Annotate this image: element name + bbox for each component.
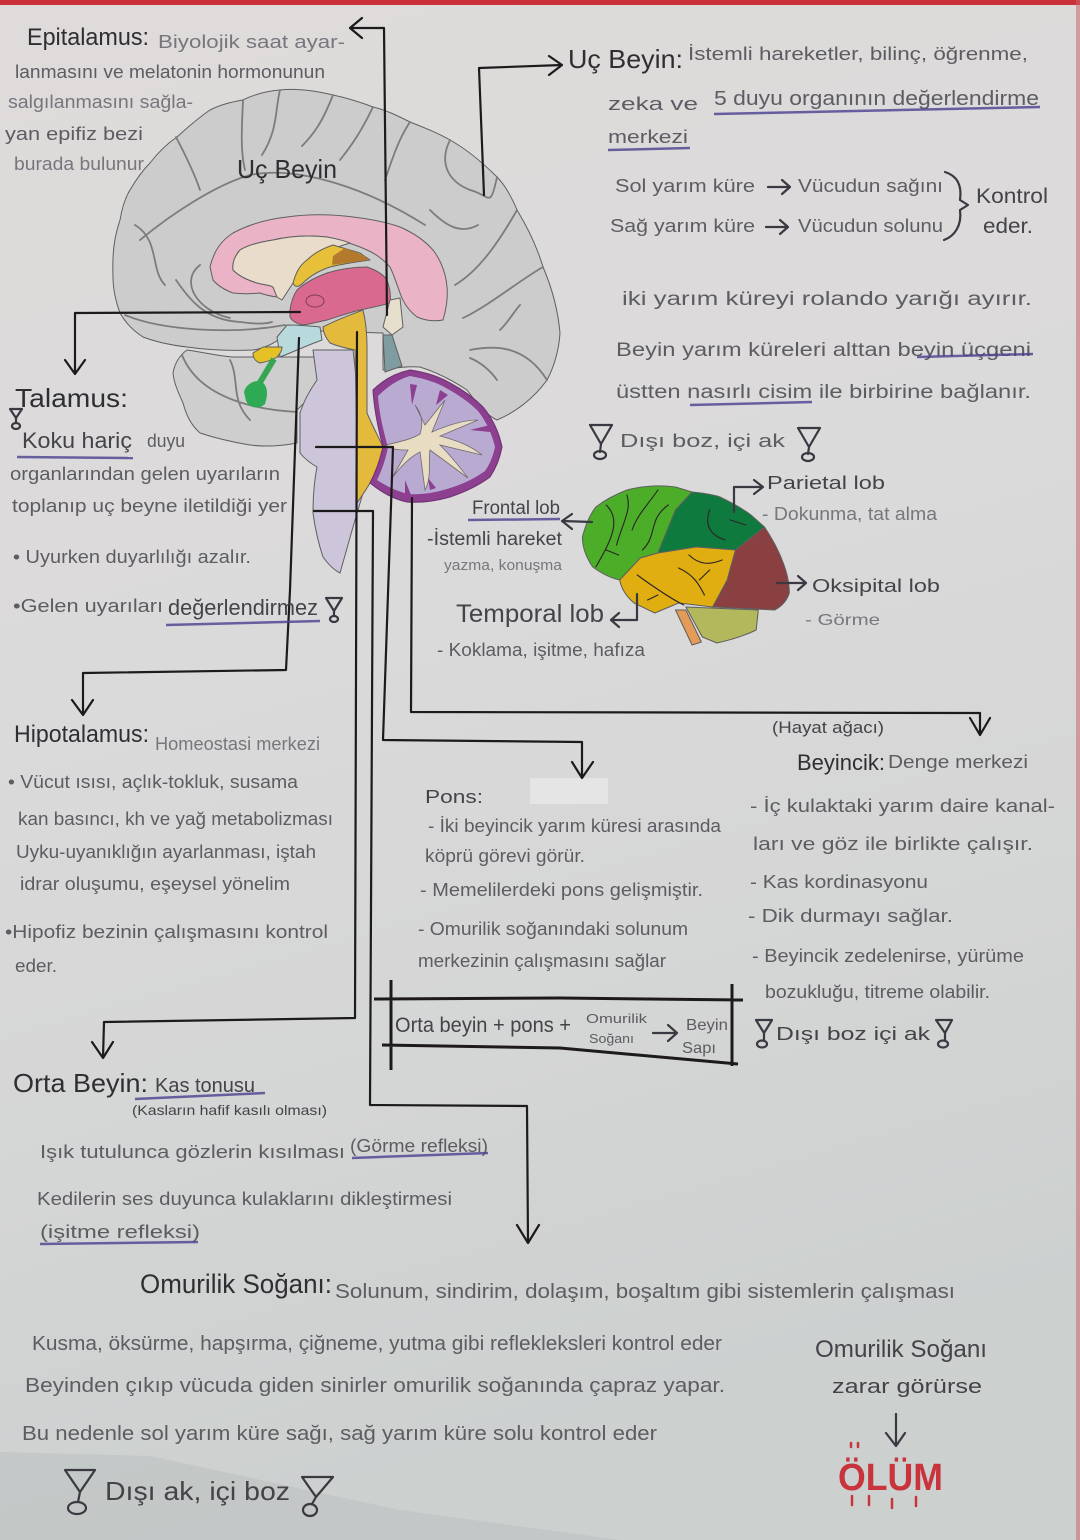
- panel: Hipotalamus: Homeostasi merkezi: [155, 734, 320, 754]
- callout: ölüm: Omurilik Soğanı: [815, 1336, 987, 1363]
- panel: Uç Beyin: üstten nasırlı cisim ile birbirine bağlanır.: [616, 382, 1031, 403]
- panel: Hipotalamus: •Hipofiz bezinin çalışmasını kontrol: [5, 922, 328, 942]
- panel: Epitalamus: burada bulunur: [14, 154, 144, 174]
- panel: Beyincik: Denge merkezi: [888, 752, 1028, 772]
- box: beyin sapı: Sapı: [682, 1040, 716, 1057]
- panel: Uç Beyin: zeka ve: [608, 94, 698, 114]
- panel: Omurilik Soğanı: Kusma, öksürme, hapşırma, çiğneme, yutma gibi reflekleksleri kontrol eder: [32, 1333, 722, 1355]
- panel: Uç Beyin: Kontrol: [976, 185, 1048, 208]
- panel: Oksipital lob: [777, 576, 940, 629]
- brainstem: [676, 610, 701, 645]
- occipital lobe: [713, 527, 789, 610]
- arrow: to omurilik soğanı: [314, 511, 539, 1243]
- blood drops: [851, 1443, 916, 1508]
- panel: Uç Beyin: Sağ yarım küre: [610, 216, 755, 236]
- fornix: [293, 245, 370, 286]
- panel: Uç Beyin: Vücudun sağını: [798, 176, 943, 196]
- midbrain: [323, 310, 383, 503]
- icon: symbol: [936, 1020, 952, 1048]
- panel: Orta Beyin: [13, 1068, 488, 1244]
- panel: Temporal lob: Temporal lob: [456, 600, 604, 628]
- panel: Epitalamus: [5, 24, 345, 174]
- panel: Beyincik: bozukluğu, titreme olabilir.: [765, 982, 990, 1002]
- connector lines: [65, 18, 990, 1243]
- icon: symbol: [756, 1020, 772, 1048]
- panel: Epitalamus: salgılanmasını sağla-: [8, 92, 193, 112]
- panel: Beyincik: - Kas kordinasyonu: [750, 872, 928, 892]
- callout: ölüm: [815, 1336, 987, 1508]
- corpus callosum: [210, 215, 447, 321]
- panel: Epitalamus: lanmasını ve melatonin hormonunun: [15, 62, 325, 82]
- panel: Frontal lob: yazma, konuşma: [444, 557, 563, 574]
- arrow: frontal lob: [562, 514, 592, 529]
- panel: Temporal lob: [437, 594, 646, 660]
- panel: Pons: [418, 787, 722, 971]
- panel: Pons: - İki beyincik yarım küresi arasında: [428, 816, 722, 836]
- panel: Epitalamus: Epitalamus:: [27, 24, 149, 51]
- arrow: to orta beyin: [92, 332, 357, 1058]
- panel: Uç Beyin: [568, 44, 1048, 461]
- cerebellum: [686, 607, 758, 643]
- panel: Uç Beyin: İstemli hareketler, bilinç, öğrenme,: [688, 44, 1028, 64]
- callout: ölüm: zarar görürse: [832, 1376, 982, 1398]
- panel: Hipotalamus: kan basıncı, kh ve yağ metabolizması: [18, 809, 333, 829]
- hypothalamus: [277, 325, 322, 357]
- lobe folds: [596, 490, 746, 605]
- panel: Beyincik: - İç kulaktaki yarım daire kanal-: [750, 796, 1055, 816]
- icon: dışı ak içi boz symbol: [302, 1477, 333, 1516]
- diagram: sagittal brain section: [113, 89, 560, 573]
- panel: Pons: - Memelilerdeki pons gelişmiştir.: [420, 880, 703, 900]
- panel: Frontal lob: -İstemli hareket: [427, 529, 563, 550]
- icon: symbol: [10, 409, 22, 429]
- panel: Uç Beyin: eder.: [983, 215, 1033, 238]
- panel: Talamus: değerlendirmez: [168, 595, 318, 620]
- panel: Pons: - Omurilik soğanındaki solunum: [418, 919, 688, 939]
- box: beyin sapı: Orta beyin + pons +: [395, 1014, 571, 1037]
- panel: Beyincik: [748, 718, 1055, 1048]
- panel: Oksipital lob: - Görme: [805, 612, 880, 629]
- panel: Beyincik: ları ve göz ile birlikte çalışır.: [753, 834, 1033, 854]
- pineal and aqueduct: [383, 298, 403, 372]
- panel: Uç Beyin: 5 duyu organının değerlendirme: [714, 88, 1039, 110]
- arrow: to talamus: [65, 312, 300, 374]
- panel: Beyincik: - Dik durmayı sağlar.: [748, 906, 953, 926]
- panel: Uç Beyin: Sol yarım küre: [615, 176, 755, 196]
- panel: Omurilik Soğanı: Dışı ak, içi boz: [105, 1476, 290, 1506]
- arrow: to epitalamus: [350, 18, 387, 315]
- panel: Beyincik: (Hayat ağacı): [772, 718, 884, 737]
- panel: Talamus: • Uyurken duyarlılığı azalır.: [13, 547, 251, 567]
- panel: Temporal lob: - Koklama, işitme, hafıza: [437, 640, 646, 660]
- panel: Oksipital lob: Oksipital lob: [812, 576, 940, 596]
- box: beyin sapı: Beyin: [686, 1017, 728, 1034]
- icon: dışı boz içi ak symbol: [798, 428, 820, 461]
- panel: Talamus: toplanıp uç beyne iletildiği yer: [12, 496, 287, 516]
- icon: dışı boz içi ak symbol: [590, 425, 612, 459]
- icon: dışı ak içi boz symbol: [65, 1470, 95, 1514]
- panel: Parietal lob: Parietal lob: [767, 473, 885, 493]
- panel: Uç Beyin: Dışı boz, içi ak: [620, 431, 786, 451]
- panel: Orta Beyin: Kedilerin ses duyunca kulaklarını dikleştirmesi: [37, 1189, 452, 1209]
- panel: Pons: merkezinin çalışmasını sağlar: [418, 951, 666, 971]
- panel: Uç Beyin: Beyin yarım küreleri alttan beyin üçgeni: [616, 340, 1031, 361]
- label: Uç Beyin: Uç Beyin: [237, 154, 337, 184]
- panel: Orta Beyin: (Kasların hafif kasılı olması): [132, 1102, 327, 1118]
- panel: Pons: köprü görevi görür.: [425, 846, 585, 866]
- panel: Frontal lob: Frontal lob: [472, 498, 560, 519]
- panel: Orta Beyin: Işık tutulunca gözlerin kısılması: [40, 1142, 345, 1162]
- panel: Orta Beyin: Kas tonusu: [155, 1075, 255, 1097]
- arrow: temporal lob: [611, 594, 637, 627]
- arrow: to hipotalamus: [72, 338, 299, 715]
- arrow: to uç beyin: [479, 56, 562, 195]
- panel: Hipotalamus: idrar oluşumu, eşeysel yönelim: [20, 874, 290, 894]
- panel: Talamus: organlarından gelen uyarıların: [10, 464, 280, 484]
- optic chiasm: [253, 347, 282, 363]
- panel: Hipotalamus: [5, 721, 333, 976]
- panel: Hipotalamus: Uyku-uyanıklığın ayarlanması, iştah: [16, 842, 316, 862]
- panel: Parietal lob: - Dokunma, tat alma: [762, 504, 938, 524]
- arrow: to beyincik: [411, 498, 990, 735]
- panel: Beyincik: Dışı boz içi ak: [776, 1024, 931, 1044]
- arrow: parietal lob: [734, 480, 763, 512]
- box: beyin sapı: Soğanı: [589, 1031, 634, 1046]
- icon: symbol: [326, 598, 342, 622]
- panel: Orta Beyin: (Görme refleksi): [350, 1136, 488, 1156]
- panel: Talamus: Koku hariç: [22, 428, 132, 453]
- callout: ölüm: ÖLÜM: [838, 1456, 943, 1499]
- arrow: oksipital lob: [777, 576, 806, 590]
- panel: Uç Beyin: Uç Beyin:: [568, 44, 683, 74]
- cerebrum: [113, 89, 560, 420]
- pituitary: [244, 359, 274, 408]
- box: beyin sapı: Omurilik: [586, 1011, 648, 1026]
- panel: Parietal lob: [734, 473, 938, 524]
- cortex folds: [125, 90, 547, 420]
- panel: Omurilik Soğanı: Solunum, sindirim, dolaşım, boşaltım gibi sistemlerin çalışması: [335, 1281, 955, 1303]
- arrow: equals: [653, 1025, 677, 1041]
- panel: Omurilik Soğanı: Bu nedenle sol yarım küre sağı, sağ yarım küre solu kontrol eder: [22, 1423, 657, 1445]
- panel: Hipotalamus: Hipotalamus:: [14, 721, 149, 748]
- panel: Epitalamus: Biyolojik saat ayar-: [158, 32, 345, 52]
- panel: Omurilik Soğanı: Beyinden çıkıp vücuda giden sinirler omurilik soğanında çapraz yapar.: [25, 1375, 725, 1397]
- arrow: to ölüm: [886, 1414, 905, 1446]
- thalamus: [290, 267, 390, 325]
- panel: Uç Beyin: merkezi: [608, 127, 688, 147]
- panel: Talamus: Talamus:: [15, 383, 128, 413]
- panel: Talamus: [10, 383, 342, 625]
- panel: Beyincik: - Beyincik zedelenirse, yürüme: [752, 946, 1024, 966]
- diagram: brain lobes: [582, 486, 789, 645]
- cerebellum: [370, 370, 502, 502]
- parietal lobe: [658, 492, 764, 553]
- panel: Orta Beyin: Orta Beyin:: [13, 1068, 148, 1098]
- brainstem: [300, 350, 367, 573]
- frontal lobe: [582, 486, 692, 580]
- panel: Pons: Pons:: [425, 787, 483, 807]
- temporal lobe: [173, 350, 323, 446]
- panel: Hipotalamus: • Vücut ısısı, açlık-tokluk, susama: [8, 772, 299, 792]
- panel: Uç Beyin: iki yarım küreyi rolando yarığı ayırır.: [622, 289, 1032, 310]
- panel: Hipotalamus: eder.: [15, 956, 57, 976]
- panel: Omurilik Soğanı: [22, 1269, 955, 1516]
- panel: Talamus: •Gelen uyarıları: [13, 596, 163, 616]
- temporal lobe: [620, 547, 736, 613]
- panel: Epitalamus: yan epifiz bezi: [5, 124, 143, 144]
- panel: Frontal lob: [427, 498, 592, 574]
- panel: Beyincik: Beyincik:: [797, 750, 885, 775]
- septum: [233, 236, 350, 300]
- arrow: to pons: [316, 447, 593, 778]
- panel: Orta Beyin: (işitme refleksi): [40, 1222, 200, 1242]
- panel: Talamus: duyu: [147, 431, 185, 451]
- box: beyin sapı: [374, 980, 743, 1070]
- panel: Uç Beyin: Vücudun solunu: [798, 216, 943, 236]
- panel: Omurilik Soğanı: Omurilik Soğanı:: [140, 1269, 332, 1299]
